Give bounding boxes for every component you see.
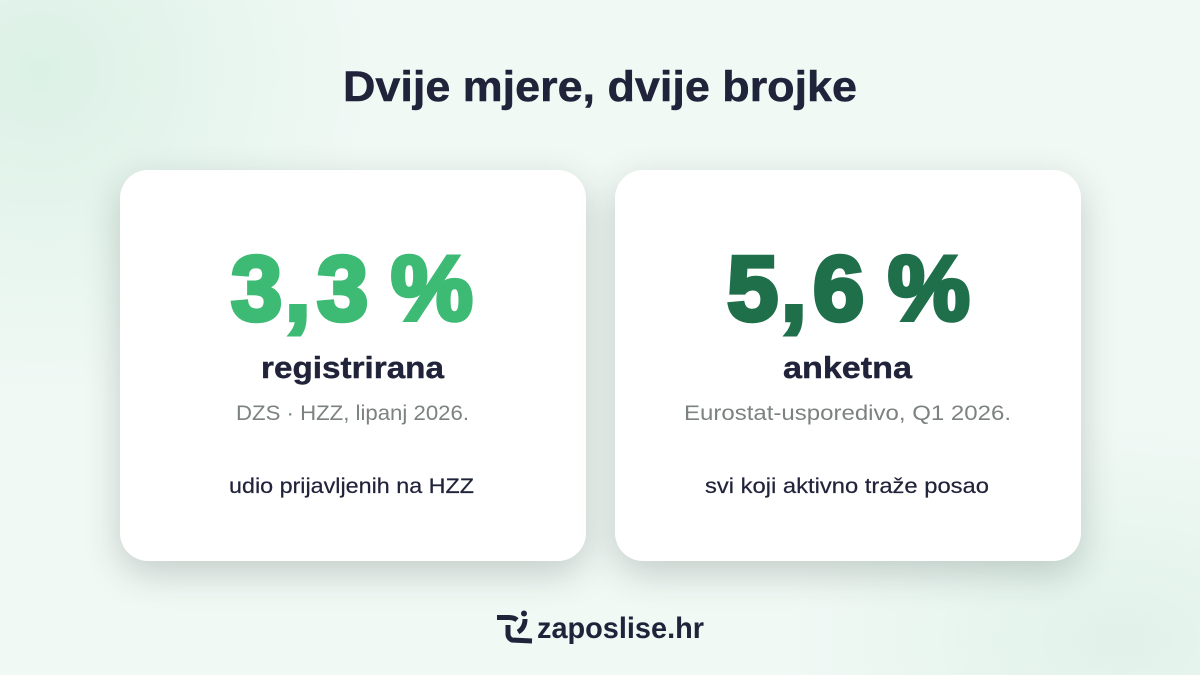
label: anketna: anketna [783, 350, 913, 385]
title: Dvije mjere, dvije brojke [343, 63, 857, 111]
anketna panel content [684, 238, 1011, 498]
description: registered: udio prijavljenih na HZZ [229, 475, 474, 498]
wordmark: zaposlise.hr [537, 612, 704, 645]
description: survey: svi koji aktivno traže posao [705, 475, 989, 498]
source: Eurostat: Eurostat-usporedivo, Q1 2026. [684, 401, 1011, 425]
panel: anketna card [615, 170, 1081, 561]
logo: zaposlise.hr [497, 610, 704, 645]
source: DZS HZZ: DZS · HZZ, lipanj 2026. [236, 401, 469, 425]
panel: registrirana card [120, 170, 586, 561]
label: registrirana: registrirana [261, 350, 445, 385]
big number: 5,6 %: 5,6 % [727, 238, 970, 340]
big number: 3,3 %: 3,3 % [231, 238, 473, 340]
icon: logo mark [497, 610, 532, 641]
registrirana panel content [229, 238, 474, 498]
